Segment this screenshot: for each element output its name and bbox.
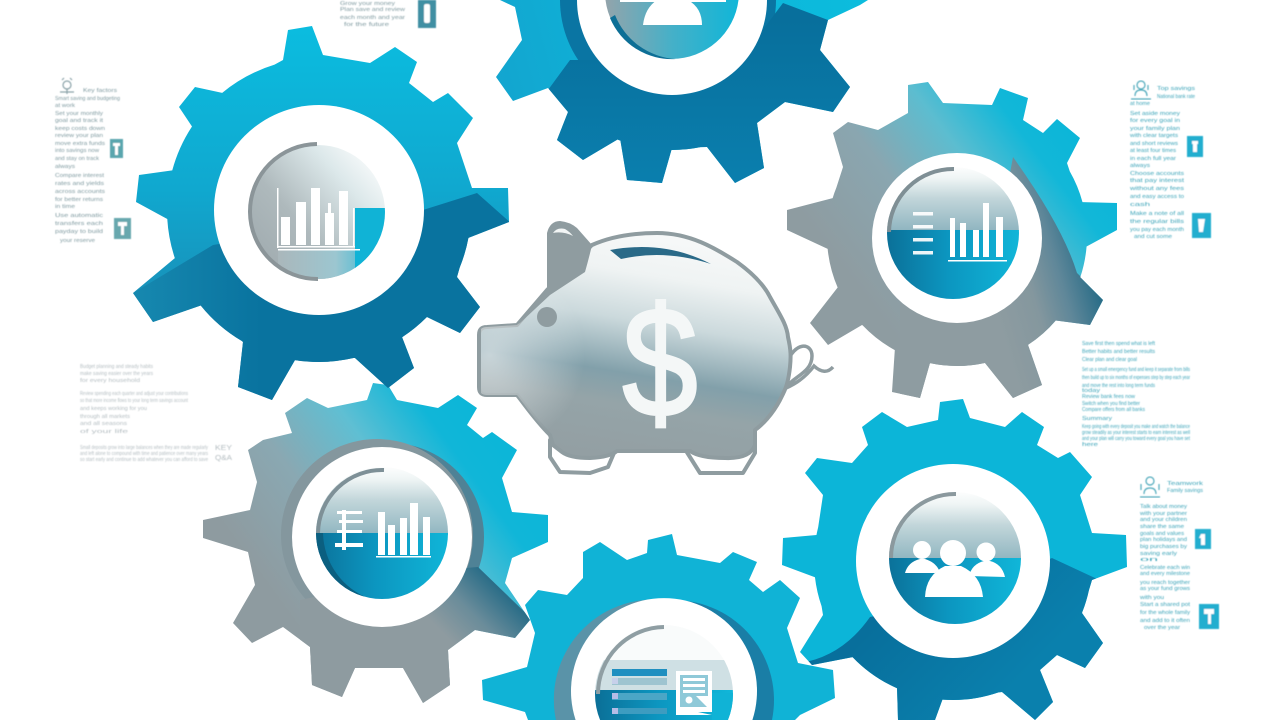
text block: upper right: Make a note of all	[1130, 211, 1184, 217]
icon: upper right header	[1131, 81, 1151, 99]
text block: lower left pale: so start early and continue to add whatever you can afford to save	[80, 457, 208, 463]
text block: lower right	[1140, 481, 1204, 631]
eye	[537, 307, 557, 327]
text block: upper right: for every goal in	[1130, 118, 1180, 124]
text block: middle right: Set up a small emergency fund and keep it separate from bills	[1082, 367, 1190, 373]
text block: upper right: always	[1130, 163, 1151, 169]
label: lower left mark	[215, 445, 232, 462]
text block: lower right: saving early	[1140, 551, 1178, 557]
text block: upper right: National bank rate	[1157, 94, 1195, 100]
icon: lower right header	[1140, 477, 1160, 497]
text block: upper left: keep costs down	[55, 126, 105, 132]
text block: middle right: and move the rest into long term funds	[1082, 383, 1155, 389]
text block: lower left pale: Review spending each quarter and adjust your contributions	[80, 391, 188, 397]
text block: lower right: share the same	[1140, 524, 1184, 530]
ring	[872, 153, 1042, 323]
text block: lower right: Talk about money	[1140, 504, 1188, 510]
text block: upper left: your reserve	[60, 238, 95, 244]
text block: middle right: Summary	[1082, 416, 1113, 422]
text block: lower right: Start a shared pot	[1140, 602, 1191, 608]
text block: upper left: review your plan	[55, 133, 103, 139]
text block: middle right	[1082, 341, 1190, 448]
text block: upper right: Set aside money	[1130, 111, 1181, 117]
text block: upper right: at home	[1130, 101, 1150, 107]
text block: lower right: with your partner	[1140, 511, 1187, 517]
text block: lower right: with you	[1140, 595, 1164, 601]
text block: upper right: with clear targets	[1130, 133, 1179, 139]
text block: lower left pale	[80, 364, 208, 463]
inner disc	[889, 497, 1021, 624]
text block: lower left pale: so that more income flows to your long term savings account	[80, 398, 188, 404]
badge: upper right two	[1192, 213, 1211, 238]
label: lower left mark: KEY	[215, 445, 232, 452]
text block: lower left pale: make saving easier over the years	[80, 371, 153, 377]
inner disc	[606, 0, 738, 59]
icon: list	[335, 510, 363, 550]
text block: middle right: Compare offers from all banks	[1082, 407, 1145, 413]
badge: upper right one	[1187, 136, 1203, 157]
badge: top	[418, 0, 436, 28]
ear	[516, 221, 592, 325]
text block: upper right: and cut some	[1134, 234, 1172, 240]
text block: upper left: for better returns	[55, 197, 104, 203]
text block: lower right: Celebrate each win	[1140, 565, 1190, 571]
text block: lower left pale: and all seasons	[80, 421, 128, 427]
icon: row labels	[913, 212, 933, 254]
text block: upper right: your family plan	[1130, 126, 1180, 132]
text block: middle right: Switch when you find better	[1082, 401, 1140, 407]
text block: middle right: then build up to six months of expenses step by step each year	[1082, 375, 1190, 381]
snout highlight	[481, 306, 572, 422]
text block: lower left pale: Small deposits grow into large balances when they are made regularly	[80, 445, 208, 451]
text block: lower left pale: for every household	[80, 378, 140, 384]
text block: middle right: today	[1082, 388, 1101, 394]
badge: lower right two	[1199, 604, 1219, 629]
icon: document	[676, 671, 712, 715]
ring	[214, 105, 424, 315]
text block: top left fragment	[340, 1, 406, 28]
text block: upper right: and easy access to	[1130, 194, 1184, 200]
text block: upper left: and stay on track	[55, 156, 100, 162]
gear: upper right chart	[780, 75, 1125, 405]
text block: lower right: over the year	[1144, 625, 1180, 631]
text block: lower left pale: through all markets	[80, 414, 131, 420]
text block: upper right: Choose accounts	[1130, 171, 1185, 177]
text block: middle right: Review bank fees now	[1082, 394, 1135, 400]
inner disc	[887, 172, 1019, 299]
text block: upper right: you pay each month	[1130, 227, 1184, 233]
text block: lower right: big purchases by	[1140, 544, 1188, 550]
text block: upper right: cash	[1130, 202, 1150, 208]
text block: upper left: always	[55, 164, 76, 170]
text block: upper right: Top savings	[1157, 86, 1196, 92]
inner disc	[595, 660, 733, 720]
text block: upper left: transfers each	[55, 221, 103, 227]
tail	[786, 346, 833, 388]
text block: middle right: Save first then spend what is left	[1082, 341, 1156, 347]
text block: upper left: in time	[55, 204, 75, 210]
text block: middle right: Keep going with every deposit you make and watch the balance	[1082, 424, 1190, 430]
text block: lower right: for the whole family	[1140, 610, 1191, 616]
text block: middle right: grow steadily as your interest starts to earn interest as well	[1082, 430, 1190, 436]
feet	[550, 430, 755, 473]
text block: upper right: without any fees	[1130, 186, 1185, 192]
text block: middle right: here	[1082, 442, 1098, 448]
text block: upper left: Use automatic	[55, 213, 104, 219]
text block: upper right: in each full year	[1130, 156, 1176, 162]
text block: upper left	[55, 88, 120, 244]
gear: lower right people	[775, 395, 1135, 720]
text block: lower right: Family savings	[1167, 488, 1204, 494]
text block: upper left: into savings now	[55, 148, 99, 154]
gear: lower left chart and list	[195, 375, 555, 715]
text block: lower left pale: Budget planning and steady habits	[80, 364, 153, 370]
icon: person	[620, 0, 726, 25]
ring	[571, 598, 757, 720]
text block: upper right: at least four times	[1130, 148, 1177, 154]
text block: upper left: Key factors	[83, 88, 118, 94]
icon: list rows	[612, 669, 667, 714]
arc	[318, 470, 384, 533]
ring	[292, 447, 472, 627]
text block: upper right	[1130, 86, 1196, 240]
text block: middle right: Better habits and better results	[1082, 349, 1156, 355]
text block: middle right: and your plan will carry you toward every goal you have set	[1082, 436, 1190, 442]
text block: upper left: move extra funds	[55, 141, 106, 147]
icon: people	[905, 540, 1005, 597]
arc	[598, 627, 664, 694]
crescent	[610, 15, 676, 59]
text block: lower right: plan holidays and	[1140, 537, 1187, 543]
text block: upper left: Compare interest	[55, 173, 105, 179]
text block: lower left pale: and keeps working for you	[80, 406, 147, 412]
gear: top centre people	[490, 0, 875, 190]
text block: top left fragment: Grow your money	[340, 1, 396, 7]
coin slot	[610, 247, 711, 264]
text block: middle right: Clear plan and clear goal	[1082, 357, 1137, 363]
icon: bar chart	[948, 203, 1007, 262]
icon: bar chart	[376, 503, 431, 558]
text block: lower left pale: of your life	[80, 429, 128, 435]
text block: upper right: and short reviews	[1130, 141, 1179, 147]
gear: bottom centre document	[482, 534, 835, 720]
text block: upper left: goal and track it	[55, 118, 104, 124]
text block: lower right: and every milestone	[1140, 571, 1190, 577]
text block: upper left: at work	[55, 103, 76, 109]
text block: upper right: the regular bills	[1130, 219, 1185, 225]
body	[479, 233, 791, 458]
text block: upper left: Set your monthly	[55, 111, 104, 117]
text block: upper left: across accounts	[55, 189, 106, 195]
badge: upper left one	[110, 139, 123, 158]
badge: lower right one	[1195, 529, 1211, 549]
icon: upper left header	[60, 78, 74, 94]
text block: lower right: on	[1140, 557, 1159, 563]
text block: upper right: that pay interest	[1130, 178, 1185, 184]
text block: lower right: and your children	[1140, 517, 1187, 523]
text block: upper left: Smart saving and budgeting	[55, 96, 120, 102]
ring	[577, 0, 767, 95]
piggy bank	[479, 221, 833, 473]
label: lower left mark: Q&A	[215, 455, 232, 462]
inner disc	[251, 145, 385, 279]
dollar sign: $	[622, 275, 698, 449]
text block: upper left: payday to build	[55, 229, 103, 235]
text block: top left fragment: Plan save and review	[340, 7, 406, 13]
text block: lower right: Teamwork	[1167, 481, 1204, 487]
text block: top left fragment: for the future	[344, 22, 389, 28]
text block: lower right: as your fund grows	[1140, 586, 1191, 592]
gear: upper left bar chart	[133, 26, 509, 400]
text block: lower right: and add to it often	[1140, 618, 1190, 624]
arc	[891, 494, 956, 558]
text block: lower right: you reach together	[1140, 580, 1190, 586]
text block: lower left pale: and left alone to compound with time and patience over many years	[80, 451, 208, 457]
arc	[250, 144, 318, 279]
badge: upper left two	[114, 218, 131, 239]
text block: top left fragment: each month and year	[340, 15, 405, 21]
text block: upper left: rates and yields	[55, 181, 105, 187]
ring	[856, 464, 1050, 658]
inner disc	[316, 472, 448, 599]
arc	[889, 169, 954, 232]
icon: bar chart	[277, 188, 360, 250]
text block: lower right: goals and values	[1140, 531, 1185, 537]
